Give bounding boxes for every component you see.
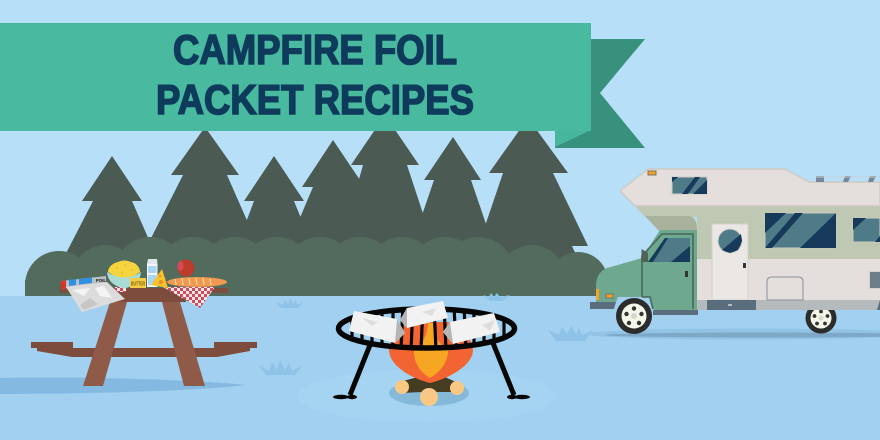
cab <box>596 230 697 310</box>
title <box>156 26 474 123</box>
title: PACKET RECIPES <box>156 76 474 123</box>
front bumper <box>590 302 616 309</box>
roof marker light <box>648 171 656 175</box>
lower hatch <box>767 277 803 300</box>
grill bars <box>350 312 506 346</box>
butter <box>130 278 146 288</box>
front wheel <box>616 298 652 334</box>
baguette <box>167 277 227 287</box>
flames <box>389 322 473 383</box>
foil box: FOIL <box>96 278 106 283</box>
table shadow <box>0 377 246 394</box>
cream lower body <box>697 259 880 300</box>
foil box <box>61 276 106 289</box>
foil packet middle <box>400 301 448 328</box>
banner tail <box>555 39 645 148</box>
bushes <box>25 237 608 319</box>
foil packet right <box>443 313 500 344</box>
rear window <box>853 218 880 242</box>
title: CAMPFIRE FOIL <box>173 26 457 73</box>
table legs <box>83 302 127 386</box>
checkered napkin <box>115 287 215 308</box>
banner fold <box>555 130 591 147</box>
roof rack <box>816 176 880 182</box>
cabover window <box>672 177 707 194</box>
pine trees <box>60 115 590 285</box>
door step <box>707 300 756 310</box>
banner <box>0 23 645 148</box>
bench boards <box>37 348 250 357</box>
foil sheet <box>66 282 125 312</box>
storage vent <box>870 272 880 288</box>
cheese <box>151 269 168 288</box>
RV shadow <box>585 328 880 340</box>
grill legs <box>350 343 514 395</box>
door handle <box>685 271 688 277</box>
door <box>712 224 748 300</box>
marker light <box>606 294 613 298</box>
fire shadow <box>389 380 469 406</box>
grass tufts <box>258 293 593 375</box>
rear wheel <box>806 302 836 334</box>
apple <box>178 260 194 276</box>
cab window <box>648 238 690 262</box>
logs <box>402 377 458 400</box>
bowl of food <box>107 260 141 288</box>
grill <box>333 305 530 399</box>
foil packet left <box>349 311 405 343</box>
side mirror <box>642 249 648 262</box>
ground <box>0 296 880 440</box>
side window <box>765 213 836 248</box>
cab overhang <box>645 216 697 232</box>
fire glow <box>297 369 557 423</box>
butter: BUTTER <box>131 282 145 288</box>
sky <box>0 0 880 297</box>
headlight <box>596 289 599 300</box>
grill ring <box>338 309 514 348</box>
picnic table <box>31 288 257 386</box>
table top <box>60 288 228 293</box>
chassis strip <box>697 300 880 310</box>
cab door outline <box>642 234 693 309</box>
milk carton <box>147 259 158 287</box>
cab sill <box>653 310 698 315</box>
banner ribbon <box>0 23 591 131</box>
sage body band <box>635 206 880 260</box>
cabover shell <box>621 169 880 206</box>
motorhome RV <box>590 169 880 334</box>
campfire <box>389 322 473 406</box>
